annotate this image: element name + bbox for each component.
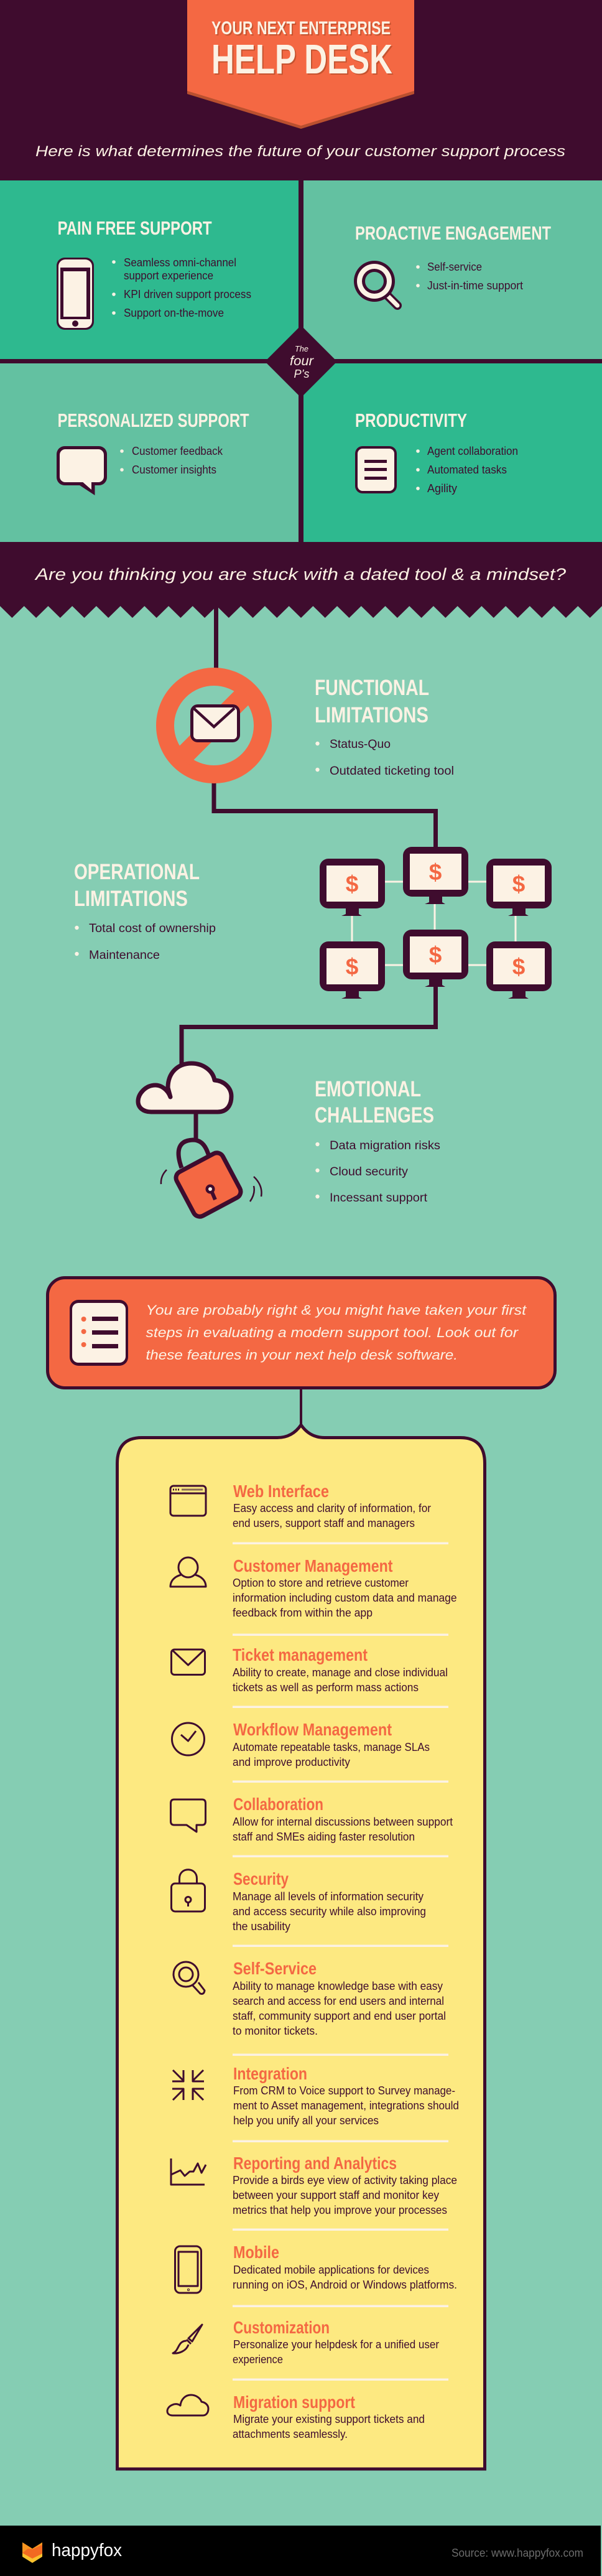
center diamond: the four P's: P’s [294,368,310,380]
text: operational limitations: Total cost of ownership [89,922,216,935]
feature: integration: help you unify all your services [233,2114,379,2127]
header background [0,0,602,180]
feature: self-service: to monitor tickets. [233,2025,318,2037]
text: emotional challenges: CHALLENGES [315,1103,434,1127]
icon: cloud [138,1063,231,1112]
text: operational limitations: OPERATIONAL [74,860,200,884]
band: zigzag banner [0,542,602,618]
subtitle: Here is what determines the future of your customer support process [35,143,565,160]
icon: document [355,446,397,493]
icon: check circle [172,1723,204,1755]
monitor 1: $ [346,871,359,897]
icon: chat bubble [170,1799,205,1832]
bullet list: Customer insights [132,464,216,476]
text: functional limitations: Status-Quo [330,738,391,751]
feature: reporting and analytics [171,2154,457,2216]
title: YOUR NEXT ENTERPRISE [211,18,391,39]
feature: customization: experience [233,2353,283,2366]
feature: self-service: Ability to manage knowledge base with easy [233,1980,443,1992]
feature: security [172,1869,426,1933]
feature: web interface: Web Interface [233,1482,329,1501]
feature: security: and access security while also improving [233,1905,426,1918]
feature: ticket management: Ability to create, manage and close individual [233,1666,448,1679]
callout [47,1278,555,1388]
feature: integration: From CRM to Voice support to Survey manage- [233,2084,455,2097]
bullet list: Agility [427,482,457,495]
feature: self-service: Self-Service [233,1959,317,1978]
monitor 2: $ [429,859,442,885]
feature: collaboration: staff and SMEs aiding faster resolution [233,1831,415,1843]
callout text: You are probably right & you might have taken your first [146,1302,527,1318]
monitor 5 [403,930,468,987]
connector lines [182,606,435,1140]
text: functional limitations: FUNCTIONAL [315,676,429,700]
text: emotional challenges: Incessant support [330,1192,428,1205]
feature: integration: Integration [233,2064,307,2083]
icon: list [70,1300,128,1366]
feature: reporting and analytics: between your support staff and monitor key [233,2189,439,2201]
callout text: these features in your next help desk software. [146,1347,458,1363]
feature: web interface: end users, support staff and managers [233,1517,415,1529]
callout text: steps in evaluating a modern support tool. Look out for [146,1325,519,1340]
feature: migration support: attachments seamlessly. [233,2428,348,2440]
feature: workflow management: Workflow Management [233,1720,392,1739]
panel: personalized support [0,363,299,542]
text: operational limitations [74,860,216,962]
source: Source: www.happyfox.com [452,2547,583,2559]
monitor 3: $ [512,871,526,897]
feature: workflow management: and improve productivity [233,1756,350,1768]
title ribbon [187,0,414,129]
bullet list: Support on-the-move [124,307,224,319]
callout text [146,1302,527,1363]
bullet list [416,261,523,292]
text: emotional challenges: EMOTIONAL [315,1077,421,1101]
feature: workflow management [172,1720,430,1768]
monitor 2 [403,847,468,904]
feature: collaboration: Allow for internal discussions between support [233,1816,453,1828]
icon: paint brush [173,2325,202,2353]
bullet list: support experience [124,269,213,282]
icon: speech bubble [57,446,107,495]
feature: migration support: Migrate your existing support tickets and [233,2413,425,2425]
feature: integration: ment to Asset management, integrations should [233,2099,459,2112]
center diamond: the four P's [265,325,337,398]
title: HELP DESK [211,36,392,83]
icon: browser window [170,1486,206,1516]
icon: magnifier [174,1962,205,1994]
panel: productivity [303,363,602,542]
feature: customization: Personalize your helpdesk for a unified user [233,2338,439,2351]
text: functional limitations: Outdated ticketing tool [330,765,454,778]
icon: padlock [172,1870,205,1911]
feature: ticket management [172,1645,448,1694]
bullet list: Automated tasks [427,464,507,476]
feature: customer management [170,1556,456,1619]
feature: mobile [175,2242,457,2293]
monitor 4 [320,941,385,999]
feature: ticket management: Ticket management [233,1645,368,1664]
feature: mobile: Mobile [233,2242,279,2262]
feature: mobile: running on iOS, Android or Windows platforms. [233,2279,457,2291]
feature: web interface: Easy access and clarity of information, for [233,1502,431,1514]
feature: reporting and analytics: metrics that help you improve your processes [233,2204,447,2216]
feature: collaboration [170,1794,453,1843]
icon: person [170,1557,206,1587]
bullet list: Just-in-time support [427,279,523,292]
panel: proactive engagement [303,180,602,359]
feature: security: Manage all levels of information security [233,1890,424,1903]
text: emotional challenges [315,1077,440,1205]
icon: no-mail sign [165,677,262,774]
feature: integration [172,2064,459,2127]
icon: mobile phone [175,2246,201,2293]
monitor 3 [486,859,552,916]
feature: reporting and analytics: Provide a birds eye view of activity taking place [233,2174,457,2186]
feature: ticket management: tickets as well as perform mass actions [233,1681,419,1694]
icon: happyfox logo [22,2542,42,2563]
feature: migration support [167,2392,425,2440]
feature: self-service [174,1959,446,2037]
footer: happyfox [52,2541,122,2560]
icon: envelope [172,1650,205,1675]
feature: workflow management: Automate repeatable tasks, manage SLAs [233,1741,430,1753]
monitor 1 [320,859,385,916]
feature: reporting and analytics: Reporting and Analytics [233,2154,397,2173]
bullet list: Self-service [427,261,482,273]
icon: falling padlock [161,1140,261,1219]
feature: migration support: Migration support [233,2392,355,2412]
feature: customer management: Option to store and retrieve customer [233,1577,409,1589]
center diamond: the four P's: The [295,344,308,353]
bullet list [416,445,518,495]
band: zigzag banner: Are you thinking you are stuck with a dated tool & a mindset? [34,565,566,584]
four P's panels [0,180,602,542]
bullet list [120,445,223,476]
feature: security: the usability [233,1920,290,1933]
feature: customization: Customization [233,2318,330,2337]
feature: self-service: search and access for end users and internal [233,1995,444,2007]
icon: converging arrows [172,2070,204,2100]
bullet list: Seamless omni-channel [124,256,236,269]
bullet list: Agent collaboration [427,445,518,457]
text: functional limitations [315,676,454,778]
monitor 4: $ [346,954,359,979]
icon: cloud outline [167,2395,208,2415]
text: functional limitations: LIMITATIONS [315,703,428,727]
panel: personalized support: PERSONALIZED SUPPORT [58,409,249,431]
feature: security: Security [233,1869,289,1888]
icon: smartphone [57,258,94,330]
text: emotional challenges: Data migration risks [330,1139,440,1152]
panel: pain free support [0,180,299,359]
text: operational limitations: Maintenance [89,949,160,962]
feature: customer management: Customer Management [233,1556,393,1575]
monitor 6 [486,941,552,999]
footer [0,2526,601,2576]
bullet list: KPI driven support process [124,288,251,301]
feature: self-service: staff, community support and end user portal [233,2010,446,2022]
text: operational limitations: LIMITATIONS [74,887,188,911]
panel: features [117,1425,485,2469]
bullet list [112,256,251,319]
feature: collaboration: Collaboration [233,1794,323,1814]
icon: network of cost monitors [320,847,552,999]
feature: customer management: feedback from within the app [233,1607,373,1619]
feature: customer management: information including custom data and manage [233,1592,456,1604]
bullet list: Customer feedback [132,445,223,457]
center diamond: the four P's: four [290,354,314,368]
icon: line chart [171,2158,206,2185]
feature: web interface [170,1482,431,1529]
connector: callout to feature panel [300,1389,302,1426]
icon: magnifier [354,261,397,306]
panel: pain free support: PAIN FREE SUPPORT [58,217,212,239]
feature: mobile: Dedicated mobile applications for devices [233,2264,429,2276]
panel: productivity: PRODUCTIVITY [355,409,467,431]
monitor 5: $ [429,942,442,968]
monitor 6: $ [512,954,526,979]
text: emotional challenges: Cloud security [330,1165,409,1178]
feature: customization [173,2318,439,2366]
title [211,18,392,83]
